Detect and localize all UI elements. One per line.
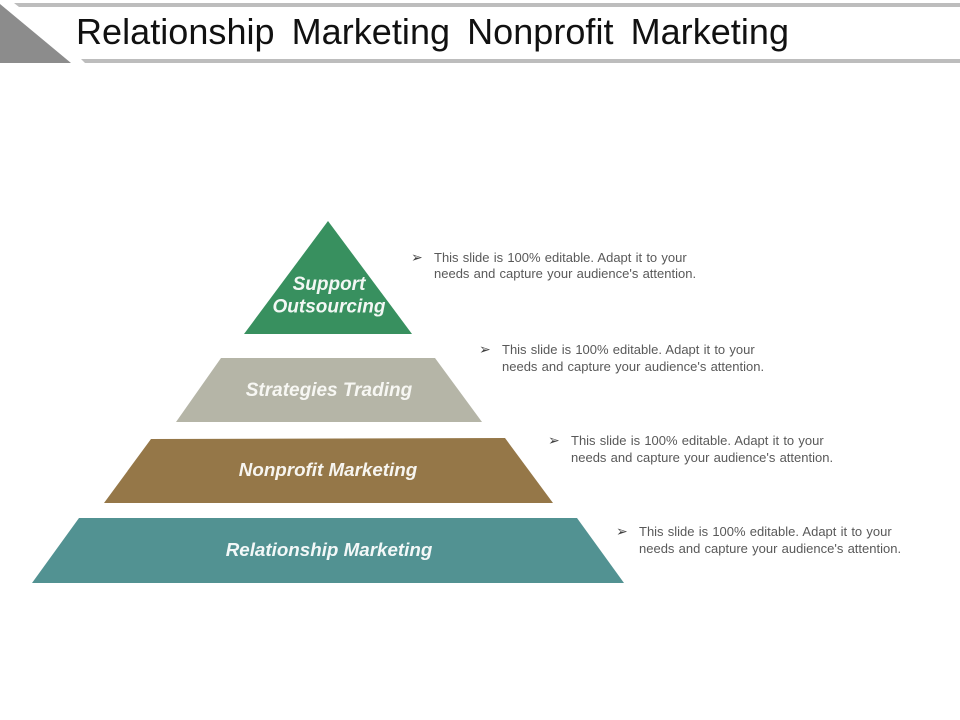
pyramid tier: Strategies Trading (176, 358, 482, 422)
pyramid tier: Support Outsourcing: Outsourcing (273, 296, 386, 318)
pyramid tier: Nonprofit Marketing (104, 438, 553, 503)
text block: tier 4 description (616, 523, 901, 556)
text block: tier 1 description: ➢ (411, 249, 423, 265)
text block: tier 3 description: needs and capture your audience's attention. (571, 450, 833, 465)
pyramid tier: Support Outsourcing (244, 221, 412, 334)
text block: tier 4 description: ➢ (616, 523, 628, 539)
text block: tier 3 description: ➢ (548, 432, 560, 448)
text block: tier 2 description: ➢ (479, 341, 491, 357)
pyramid (32, 221, 624, 583)
icon: header corner triangle (0, 4, 71, 63)
pyramid tier: Nonprofit Marketing: Nonprofit Marketing (239, 459, 418, 480)
text block: tier 2 description (479, 341, 764, 374)
text block: tier 4 description: This slide is 100% editable. Adapt it to your (639, 524, 892, 539)
text block: tier 1 description: needs and capture your audience's attention. (434, 266, 696, 281)
text block: tier 3 description: This slide is 100% editable. Adapt it to your (571, 433, 824, 448)
title: Relationship Marketing Nonprofit Marketing (76, 11, 789, 52)
pyramid tier: Relationship Marketing (32, 518, 624, 583)
pyramid tier: Relationship Marketing: Relationship Marketing (226, 539, 433, 560)
text block: tier 4 description: needs and capture your audience's attention. (639, 541, 901, 556)
text block: tier 2 description: needs and capture your audience's attention. (502, 359, 764, 374)
text block: tier 1 description: This slide is 100% editable. Adapt it to your (434, 250, 687, 265)
text block: tier 3 description (548, 432, 833, 465)
text block: tier 1 description (411, 249, 696, 281)
text block: tier 2 description: This slide is 100% editable. Adapt it to your (502, 342, 755, 357)
header band (0, 3, 960, 63)
pyramid tier: Strategies Trading: Strategies Trading (246, 380, 413, 401)
pyramid tier: Support Outsourcing: Support (293, 274, 366, 295)
